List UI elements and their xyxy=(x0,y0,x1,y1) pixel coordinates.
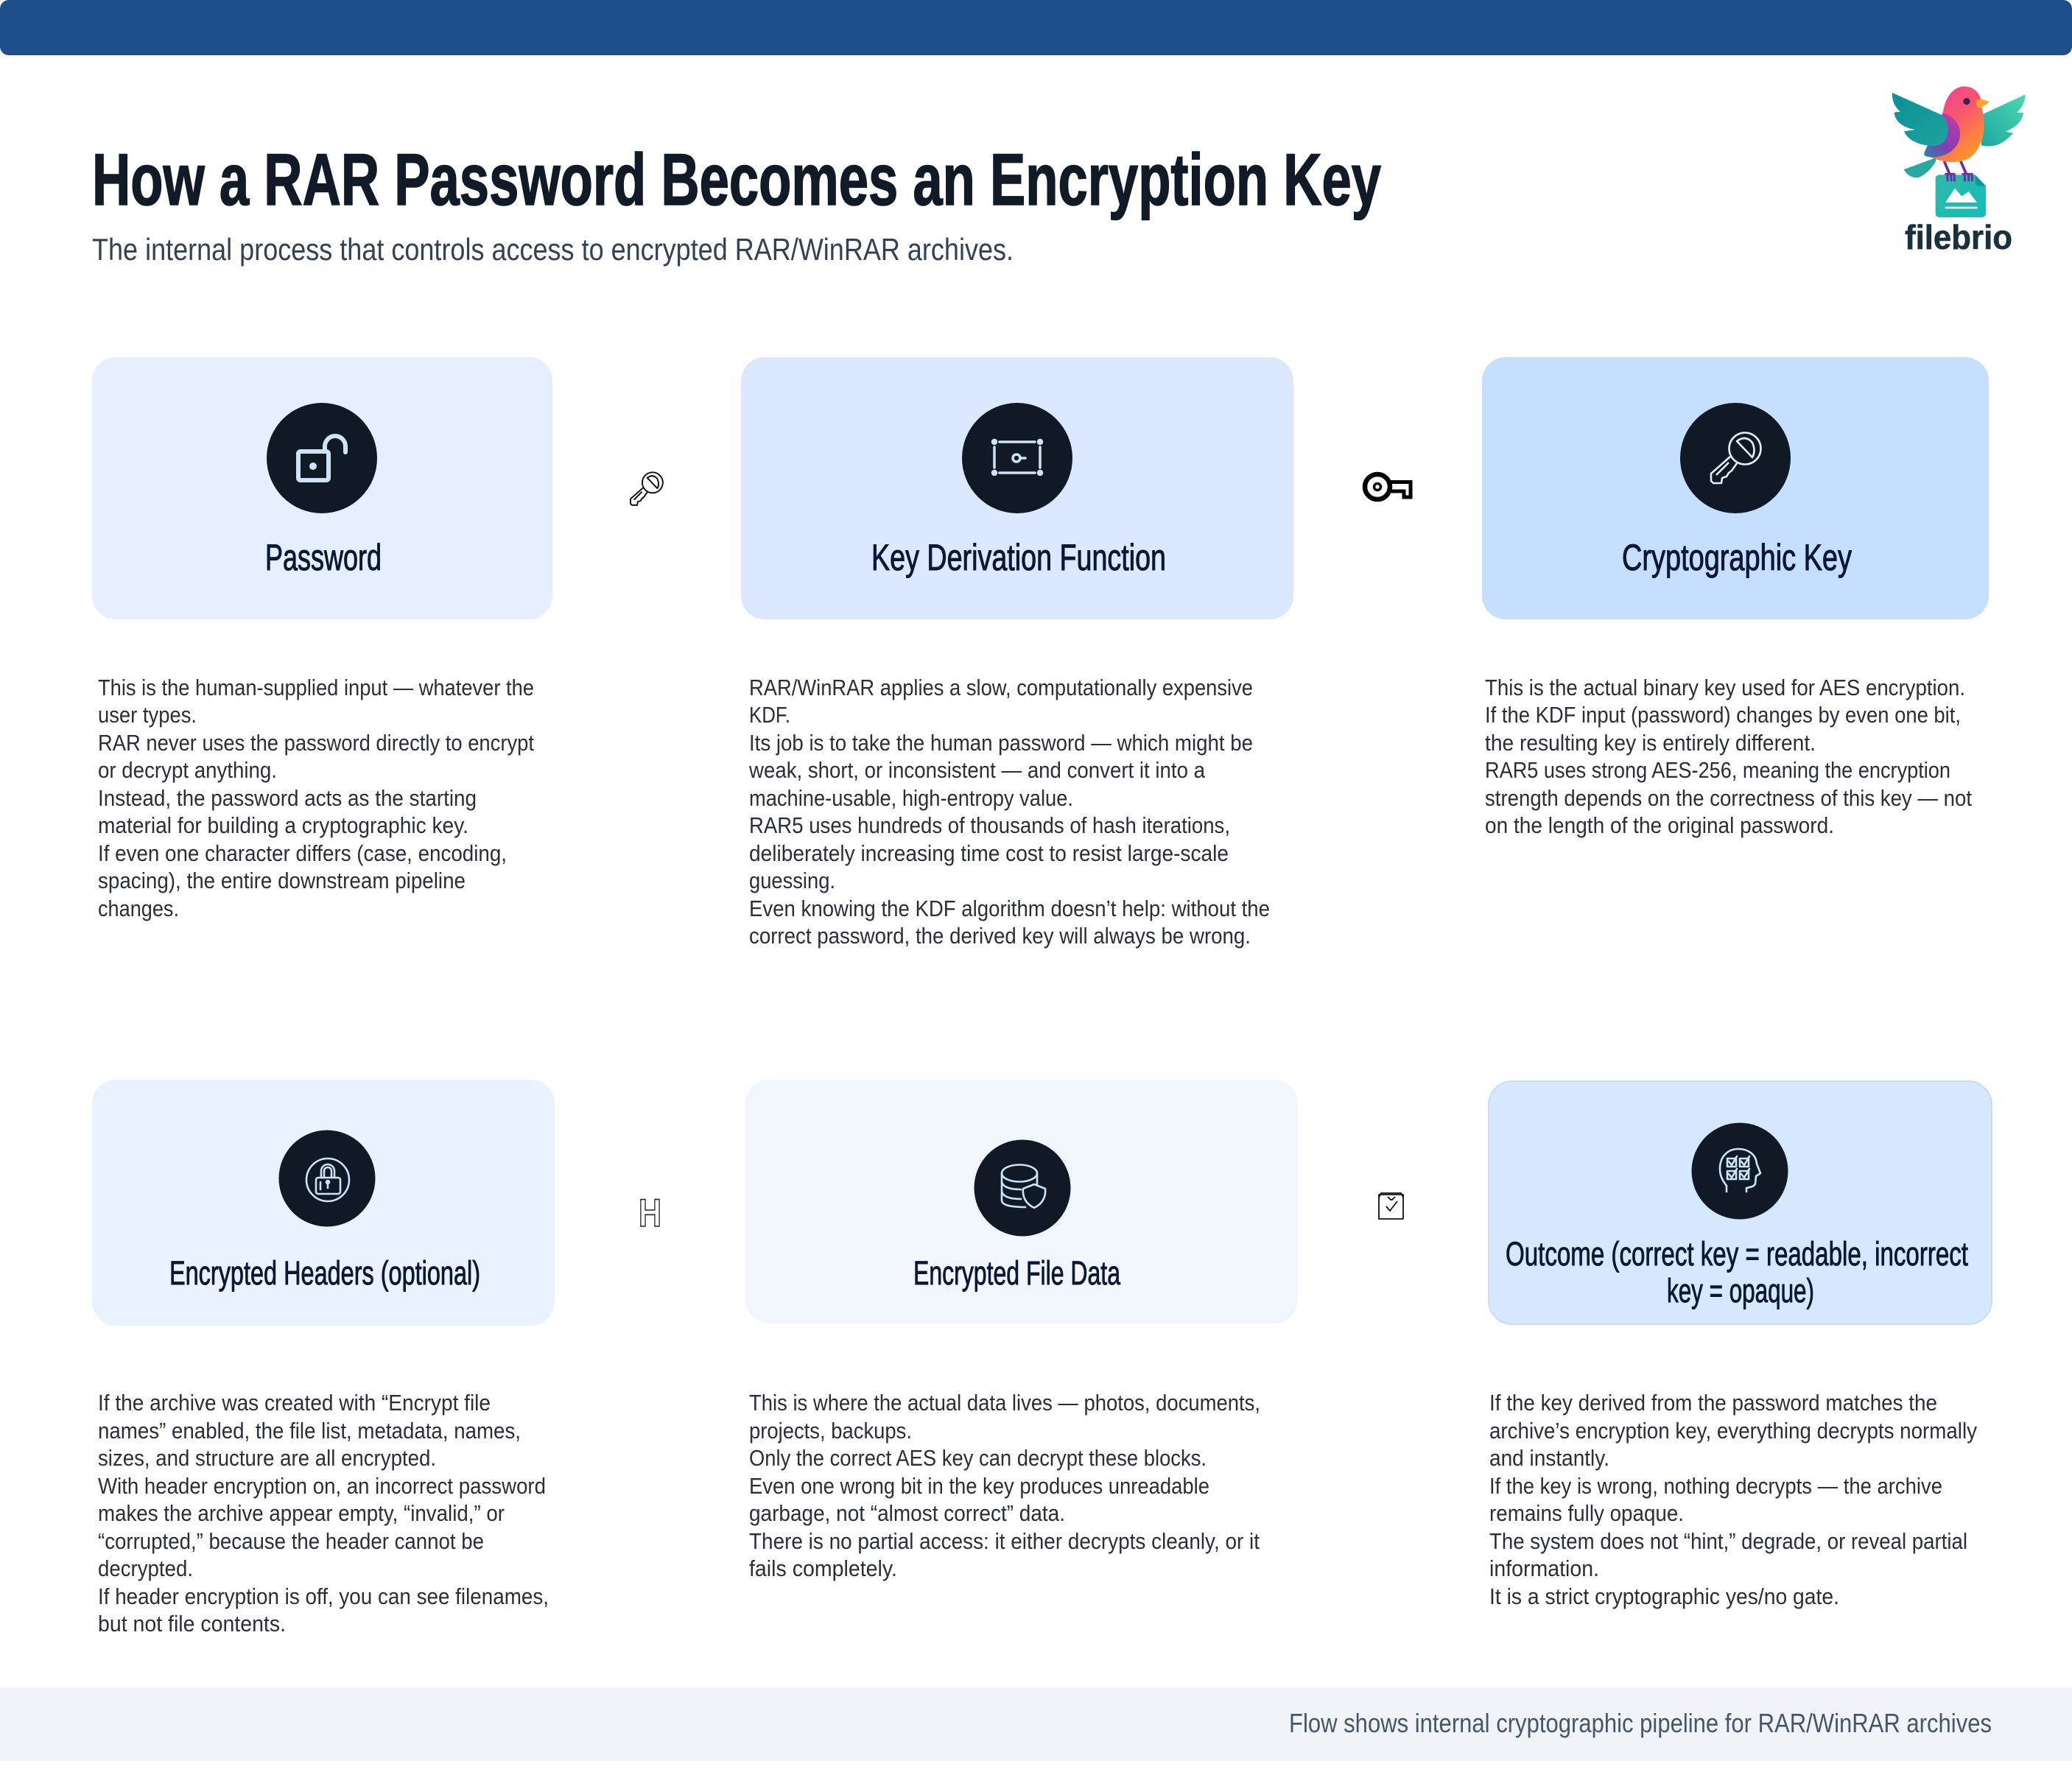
body text: encrypted file data: Only the correct AES key can decrypt these blocks. xyxy=(749,1445,1207,1471)
body text: password: or decrypt anything. xyxy=(98,757,277,783)
body text: password: Instead, the password acts as the starting xyxy=(98,785,477,811)
heading: Encrypted File Data xyxy=(913,1254,1121,1292)
icon: key in frame xyxy=(993,440,1042,474)
icon: padlock in ring xyxy=(306,1159,349,1201)
icon: mountains xyxy=(1945,189,1977,203)
body text: encrypted headers: With header encryption on, an incorrect password xyxy=(98,1473,546,1499)
panel: key derivation function xyxy=(741,357,1293,619)
body text: password: RAR never uses the password directly to encrypt xyxy=(98,730,534,756)
icon circle xyxy=(974,1140,1071,1236)
body text: cryptographic key: on the length of the original password. xyxy=(1485,812,1834,838)
icon: bird eye xyxy=(1963,98,1970,105)
panel: outcome xyxy=(1489,1081,1992,1324)
body text: outcome: If the key derived from the password matches the xyxy=(1489,1390,1937,1416)
body text: encrypted headers: sizes, and structure are all encrypted. xyxy=(98,1445,436,1471)
body text: encrypted file data: This is where the actual data lives — photos, documents, xyxy=(749,1390,1260,1416)
logo: filebrio bird xyxy=(1892,86,2025,217)
body text: cryptographic key: strength depends on the correctness of this key — not xyxy=(1485,785,1972,811)
icon: connector bold key xyxy=(1365,474,1411,499)
body text: key derivation function: Even knowing the KDF algorithm doesn’t help: without the xyxy=(749,896,1270,921)
icon: bird tail xyxy=(1904,158,1936,177)
icon: bird body xyxy=(1931,86,1984,162)
body text: encrypted file data xyxy=(749,1390,1260,1581)
heading: Encrypted Headers (optional) xyxy=(169,1254,480,1292)
body text: key derivation function: Its job is to take the human password — which might be xyxy=(749,730,1253,756)
heading: Password xyxy=(265,537,382,578)
body text: encrypted headers xyxy=(98,1390,549,1636)
body text: password: user types. xyxy=(98,702,197,728)
title: How a RAR Password Becomes an Encryption Key xyxy=(92,138,1381,220)
card background xyxy=(741,357,1293,619)
top banner xyxy=(0,0,2072,55)
card background xyxy=(1489,1081,1992,1324)
icon circle xyxy=(1691,1122,1788,1220)
body text: key derivation function: RAR/WinRAR applies a slow, computationally expensive xyxy=(749,675,1253,700)
body text: encrypted headers: names” enabled, the file list, metadata, names, xyxy=(98,1418,521,1444)
card background xyxy=(745,1080,1298,1323)
body text: key derivation function: RAR5 uses hundreds of thousands of hash iterations, xyxy=(749,812,1230,838)
panel: encrypted file data xyxy=(745,1080,1298,1323)
body text: encrypted file data: Even one wrong bit in the key produces unreadable xyxy=(749,1473,1209,1499)
body text: cryptographic key: RAR5 uses strong AES-256, meaning the encryption xyxy=(1485,757,1950,783)
body text: encrypted headers: decrypted. xyxy=(98,1555,193,1581)
body text: outcome: and instantly. xyxy=(1489,1445,1609,1471)
card background xyxy=(92,1080,555,1326)
body text: cryptographic key: If the KDF input (password) changes by even one bit, xyxy=(1485,702,1961,728)
body text: encrypted headers: makes the archive appear empty, “invalid,” or xyxy=(98,1500,505,1526)
icon: bird left wing xyxy=(1892,93,1948,146)
icon: document fold xyxy=(1976,175,1986,186)
icon: document xyxy=(1936,175,1986,217)
body text: outcome: archive’s encryption key, everything decrypts normally xyxy=(1489,1418,1977,1444)
body text: cryptographic key: the resulting key is entirely different. xyxy=(1485,730,1816,756)
body text: key derivation function: machine-usable, high-entropy value. xyxy=(749,785,1073,811)
icon circle xyxy=(962,403,1072,513)
body text: key derivation function: guessing. xyxy=(749,868,835,893)
body text: password xyxy=(98,675,534,921)
heading: Key Derivation Function xyxy=(871,537,1166,578)
body text: key derivation function: deliberately increasing time cost to resist large-scale xyxy=(749,840,1229,866)
card background xyxy=(92,357,552,619)
icon: connector checked envelope xyxy=(1379,1193,1403,1219)
body text: outcome: information. xyxy=(1489,1555,1599,1581)
icon: database with shield xyxy=(1002,1165,1045,1208)
body text: key derivation function: weak, short, or inconsistent — and convert it into a xyxy=(748,757,1206,783)
icon: connector key outline xyxy=(631,472,663,505)
icon: bird legs xyxy=(1945,161,1972,180)
heading xyxy=(1506,1235,1968,1309)
body text: key derivation function: correct password, the derived key will always be wrong. xyxy=(749,923,1251,949)
body text: encrypted file data: projects, backups. xyxy=(749,1418,912,1444)
body text: key derivation function xyxy=(748,675,1270,949)
logo wordmark: filebrio xyxy=(1905,218,2012,256)
icon: bird beak xyxy=(1976,99,1990,108)
body text: outcome xyxy=(1489,1390,1977,1609)
body text: cryptographic key xyxy=(1485,675,1972,838)
icon: document line xyxy=(1945,207,1978,208)
body text: password: spacing), the entire downstream pipeline xyxy=(98,868,466,893)
body text: encrypted headers: If the archive was created with “Encrypt file xyxy=(98,1390,491,1416)
icon circle xyxy=(278,1130,376,1227)
body text: key derivation function: KDF. xyxy=(749,702,790,728)
body text: password: changes. xyxy=(98,896,179,921)
footer band xyxy=(0,1687,2072,1761)
icon: key xyxy=(1711,433,1760,483)
icon circle xyxy=(1680,403,1791,513)
panel: password xyxy=(92,357,552,619)
icon: open padlock xyxy=(298,436,345,480)
icon circle xyxy=(267,403,377,513)
icon: head with checkboxes xyxy=(1720,1149,1760,1192)
subtitle: The internal process that controls access to encrypted RAR/WinRAR archives. xyxy=(92,232,1014,267)
icon: bird claws xyxy=(1948,175,1972,180)
body text: encrypted headers: “corrupted,” because the header cannot be xyxy=(98,1528,484,1554)
body text: password: If even one character differs (case, encoding, xyxy=(98,840,507,866)
body text: outcome: If the key is wrong, nothing decrypts — the archive xyxy=(1489,1473,1942,1499)
card background xyxy=(1482,357,1989,619)
icon: bird right wing xyxy=(1981,94,2025,146)
body text: encrypted headers: but not file contents. xyxy=(98,1611,286,1636)
heading: Cryptographic Key xyxy=(1622,537,1852,578)
body text: encrypted file data: fails completely. xyxy=(749,1555,897,1581)
body text: password: material for building a cryptographic key. xyxy=(98,812,468,838)
body text: outcome: The system does not “hint,” degrade, or reveal partial xyxy=(1489,1528,1967,1554)
body text: encrypted file data: There is no partial access: it either decrypts cleanly, or it xyxy=(749,1528,1260,1554)
body text: outcome: It is a strict cryptographic yes/no gate. xyxy=(1489,1583,1839,1609)
panel: encrypted headers xyxy=(92,1080,555,1326)
panel: cryptographic key xyxy=(1482,357,1989,619)
body text: encrypted file data: garbage, not “almost correct” data. xyxy=(749,1500,1065,1526)
icon: bird inner wing xyxy=(1924,113,1960,157)
body text: password: This is the human-supplied input — whatever the xyxy=(98,675,534,700)
icon: connector outlined H: H xyxy=(639,1192,661,1235)
body text: outcome: remains fully opaque. xyxy=(1489,1500,1684,1526)
body text: cryptographic key: This is the actual binary key used for AES encryption. xyxy=(1485,675,1965,700)
body text: encrypted headers: If header encryption is off, you can see filenames, xyxy=(98,1583,549,1609)
heading: key = opaque) xyxy=(1667,1272,1814,1309)
